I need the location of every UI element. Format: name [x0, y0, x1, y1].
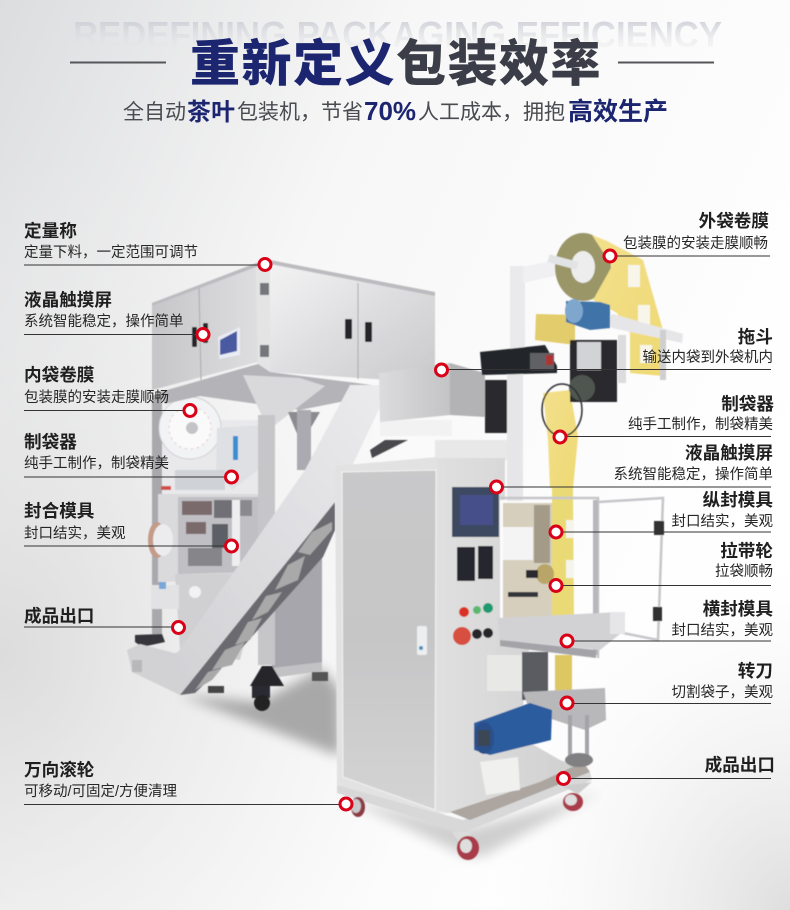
dark mechanism block: [542, 314, 683, 436]
label: 拉带轮: [715, 541, 773, 580]
pulling wheel assembly: [503, 503, 554, 633]
label: 制袋器 left: 制袋器: [24, 432, 77, 452]
label: 内袋卷膜: 包装膜的安装走膜顺畅: [24, 389, 169, 406]
label: 万向滚轮: 万向滚轮: [24, 760, 95, 780]
label: 液晶触摸屏 left: 液晶触摸屏: [24, 290, 112, 310]
label: 转刀: [672, 661, 773, 701]
label: 内袋卷膜: [24, 365, 169, 406]
inner film roll: [159, 397, 262, 490]
rear packaging column: [148, 395, 322, 678]
label: 成品出口 right: 成品出口: [705, 755, 775, 775]
label: 纵封模具: 纵封模具: [703, 490, 773, 510]
label: 封合模具: 封合模具: [24, 501, 95, 521]
label: 成品出口 left: 成品出口: [24, 606, 94, 626]
label: 拖斗: [642, 327, 773, 366]
machine: right vertical packer: [335, 233, 683, 860]
label: 封合模具: 封口结实，美观: [24, 525, 126, 542]
label: 制袋器 left: 纯手工制作，制袋精美: [24, 455, 169, 472]
label: 液晶触摸屏 right: [614, 443, 773, 483]
subtitle: 人工成本，拥抱: [418, 101, 565, 124]
top hopper chute: [379, 363, 485, 422]
label: 横封模具: [672, 599, 773, 639]
hopper left panel: [152, 265, 258, 390]
label: 制袋器 right: 纯手工制作，制袋精美: [628, 416, 773, 433]
label: 转刀: 切割袋子，美观: [672, 684, 773, 701]
label: 转刀: 转刀: [738, 661, 773, 681]
label: 制袋器 left: [24, 432, 169, 472]
label: 拉带轮: 拉袋顺畅: [715, 563, 773, 580]
junction box: [480, 757, 520, 795]
label: 拉带轮: 拉带轮: [720, 541, 773, 561]
label: 拖斗: 输送内袋到外袋机内: [642, 349, 773, 366]
funnel and support: [160, 364, 372, 686]
heading: English watermark: REDEFINING PACKAGING EFFICIENCY: [73, 14, 722, 55]
blue film motor: [565, 299, 610, 330]
subtitle: [123, 96, 668, 126]
cabinet base: [337, 762, 592, 833]
cabinet side face: [437, 458, 583, 813]
film feed column: [370, 256, 573, 501]
label: 定量称: 定量称: [24, 221, 77, 241]
title: 包装效率: [396, 36, 602, 92]
outer film roll: [547, 233, 663, 376]
hopper LCD screen: [218, 327, 240, 359]
label: 外袋卷膜: [623, 211, 769, 252]
subtitle: 包装机，节省: [237, 101, 363, 124]
label: 横封模具: 横封模具: [703, 599, 773, 619]
subtitle: 70%: [364, 96, 416, 126]
subtitle: 全自动: [123, 101, 186, 124]
label: 液晶触摸屏 right: 液晶触摸屏: [685, 443, 773, 463]
callout lines and markers: [24, 250, 771, 810]
safety door and frame: [500, 498, 664, 658]
cutter box: [487, 652, 606, 767]
control buttons: [453, 603, 493, 645]
hopper right panel: [270, 262, 435, 383]
label: 封合模具: [24, 501, 126, 542]
label: 拖斗: 拖斗: [738, 327, 773, 347]
subtitle: 茶叶: [187, 99, 235, 126]
conveyor belt: [127, 385, 381, 695]
label: 液晶触摸屏 left: [24, 290, 184, 330]
label: 万向滚轮: 可移动/可固定/方便清理: [24, 783, 178, 800]
title: [70, 36, 714, 92]
label: 横封模具: 封口结实，美观: [672, 622, 773, 639]
touch screen: [452, 487, 499, 537]
bag film strip: [535, 314, 578, 693]
caster: [208, 672, 328, 711]
label: 制袋器 right: [628, 394, 774, 433]
label: 液晶触摸屏 left: 系统智能稳定，操作简单: [24, 313, 184, 330]
casters: [351, 782, 592, 860]
label: 纵封模具: [672, 490, 773, 530]
label: 定量称: [24, 221, 198, 261]
label: 外袋卷膜: 外袋卷膜: [699, 211, 769, 231]
sealing tray: [498, 612, 625, 658]
machine: left tea packaging unit: [127, 260, 435, 711]
blue cutter motor: [474, 703, 552, 755]
label: 液晶触摸屏 right: 系统智能稳定，操作简单: [614, 466, 773, 483]
label: 内袋卷膜: 内袋卷膜: [24, 365, 94, 385]
subtitle: 高效生产: [568, 98, 668, 126]
hopper handles: [192, 319, 372, 347]
title: 重新定义: [190, 36, 396, 92]
label: 万向滚轮: [24, 760, 178, 800]
cabinet door: [342, 470, 436, 810]
floor shadow: [179, 668, 600, 856]
date printer box: [480, 345, 557, 375]
temperature controllers: [457, 546, 493, 581]
label: 定量称: 定量下料，一定范围可调节: [24, 244, 198, 261]
hopper centre post: [256, 262, 270, 372]
label: 外袋卷膜: 包装膜的安装走膜顺畅: [623, 235, 768, 252]
label: 纵封模具: 封口结实，美观: [672, 513, 773, 530]
cabinet front: [335, 457, 446, 815]
label: 制袋器 right: 制袋器: [721, 394, 774, 414]
